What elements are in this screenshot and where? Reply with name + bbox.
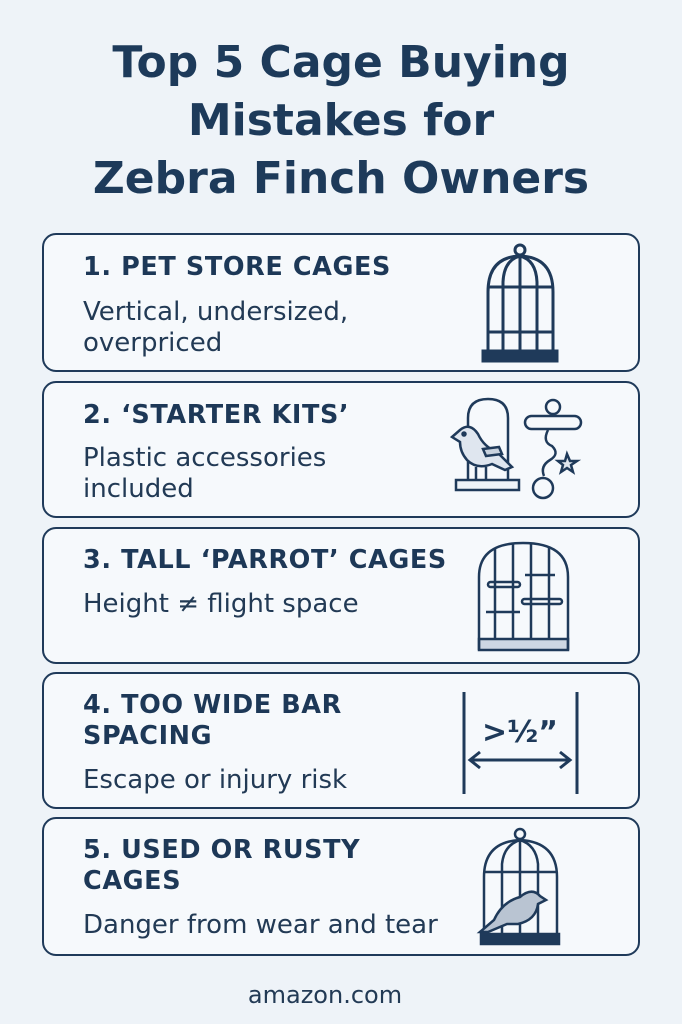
icon: cage with bird <box>476 828 560 946</box>
footer source: amazon.com <box>248 981 402 1009</box>
text 2: included <box>83 474 194 504</box>
heading 5: 5. USED OR RUSTY <box>83 835 360 865</box>
heading 2: 2. ‘STARTER KITS’ <box>83 400 349 430</box>
icon: spacing measurement: >½” <box>482 715 558 750</box>
icon: spacing measurement <box>462 692 578 794</box>
panel: used rusty cages <box>42 817 640 956</box>
icon: tall cage <box>478 542 570 652</box>
text 4: Escape or injury risk <box>83 765 347 795</box>
heading 4: SPACING <box>83 721 212 751</box>
heading 5: CAGES <box>83 866 181 896</box>
panel: tall parrot cages <box>42 527 640 664</box>
text 5: Danger from wear and tear <box>83 910 438 940</box>
heading 4 <box>83 690 342 751</box>
panel: pet store cages <box>42 233 640 372</box>
icon: birdcage <box>482 244 558 362</box>
panel: starter kits <box>42 381 640 518</box>
text 1: overpriced <box>83 328 222 358</box>
heading 3: 3. TALL ‘PARROT’ CAGES <box>83 545 447 575</box>
text 1: Vertical, undersized, <box>83 297 348 327</box>
panel: bar spacing <box>42 672 640 809</box>
text 2 <box>83 443 326 504</box>
title: Top 5 Cage Buying <box>112 37 570 88</box>
heading 4: 4. TOO WIDE BAR <box>83 690 342 720</box>
heading 5 <box>83 835 360 896</box>
title: Zebra Finch Owners <box>93 153 589 204</box>
title <box>93 37 589 204</box>
title: Mistakes for <box>188 95 494 146</box>
text 1 <box>83 297 348 358</box>
text 3: Height ≠ flight space <box>83 589 359 619</box>
text 2: Plastic accessories <box>83 443 326 473</box>
icon: bird perch and toy <box>450 398 582 500</box>
heading 1: 1. PET STORE CAGES <box>83 252 391 282</box>
